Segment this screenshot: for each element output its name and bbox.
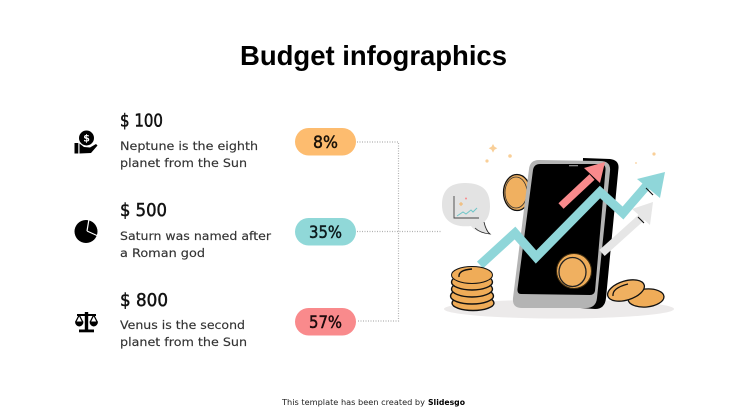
icon: hand holding coin: $ (83, 134, 90, 144)
description: a Roman god (120, 246, 205, 260)
footer credit: Slidesgo (428, 398, 466, 407)
pill: 8% (295, 128, 356, 156)
icon: pie chart (74, 219, 98, 243)
phone (513, 158, 619, 309)
description: Neptune is the eighth (120, 139, 258, 153)
pill: 35% (295, 218, 356, 246)
icon: balance scales (75, 312, 98, 332)
coins on right (605, 276, 665, 309)
coin on screen (556, 254, 592, 288)
pill: 57%: 57% (309, 313, 342, 333)
description: planet from the Sun (120, 156, 247, 170)
speech bubble with chart (442, 183, 490, 234)
item: $800 (75, 291, 247, 349)
amount: $ 800 (120, 291, 168, 311)
amount: $ 100 (120, 112, 163, 132)
description: Venus is the second (120, 318, 245, 332)
icon: hand holding coin (74, 130, 98, 154)
title: Budget infographics (240, 40, 507, 71)
item: $500 (74, 201, 271, 260)
teal growth arrow (480, 172, 665, 265)
dotted connectors (357, 142, 441, 321)
description: Saturn was named after (120, 229, 271, 243)
item: $100 (74, 112, 258, 170)
illustration: phone with growth arrows and coins (442, 144, 674, 318)
coin stack (450, 266, 494, 310)
pink arrow on screen (561, 162, 605, 206)
pill: 8%: 8% (313, 133, 338, 153)
description: planet from the Sun (120, 335, 247, 349)
pill: 57% (295, 308, 356, 336)
coin behind phone (504, 174, 530, 210)
ground shadow (444, 300, 674, 318)
footer credit: This template has been created by (281, 398, 425, 407)
pill: 35%: 35% (309, 223, 342, 243)
amount: $ 500 (120, 201, 167, 221)
sparkles (485, 144, 656, 164)
gray arrow (602, 202, 653, 253)
